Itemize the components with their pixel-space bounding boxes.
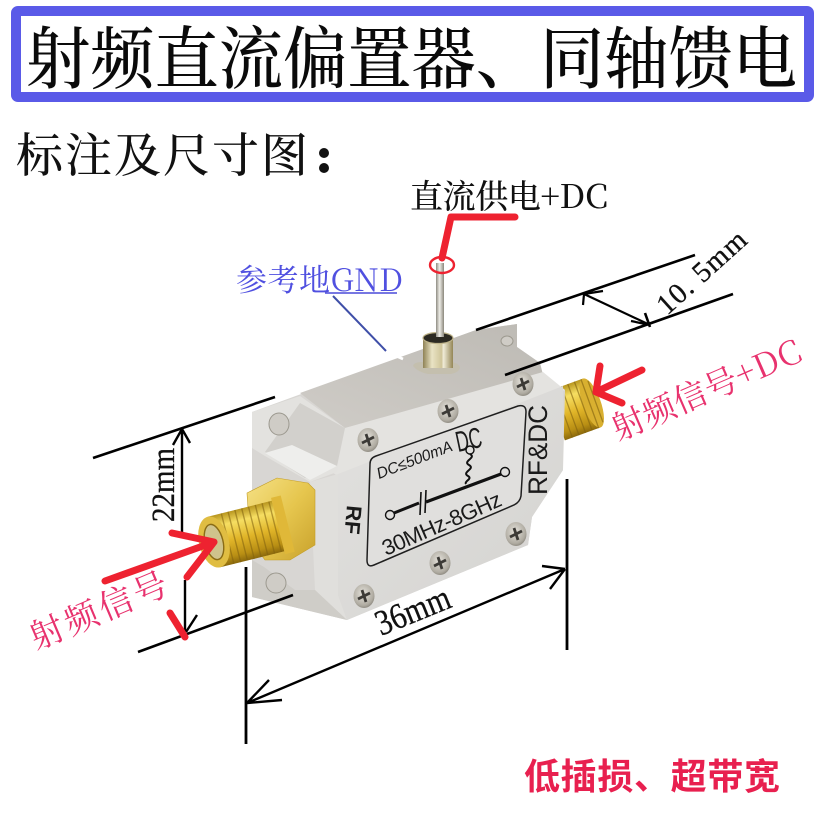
left connector [192, 478, 315, 574]
label text: RF and DC port: RF&DC [523, 405, 553, 495]
arrow: RF input [105, 533, 214, 637]
feature note: 低插损、超带宽 [524, 748, 780, 800]
label: reference ground: 参考地GND [236, 255, 403, 300]
dimension: 22mm: 22mm [146, 448, 182, 522]
label text: RF port: RF [340, 505, 366, 535]
label: DC supply: 直流供电+DC [410, 171, 608, 218]
label text: current limit: DC≤500mA [374, 438, 455, 483]
right connector [547, 375, 609, 440]
device body [252, 324, 565, 620]
title banner: 射频直流偏置器、同轴馈电 [26, 5, 797, 103]
threaded mounting holes [266, 336, 513, 593]
dimension: 10.5mm [476, 224, 754, 375]
label text: DC port: DC [453, 422, 485, 459]
arrow: DC supply pointer [430, 217, 515, 273]
screws [354, 372, 534, 608]
dimension: 10.5mm: 10. 5mm [650, 224, 754, 321]
subtitle: 标注及尺寸图 [16, 119, 308, 186]
label: reference ground [236, 255, 403, 359]
dimension: 22mm [93, 397, 293, 652]
top DC feed pin [413, 263, 460, 374]
product label outline [367, 406, 526, 566]
arrow: RF+DC input [596, 366, 642, 403]
dimension: 36mm: 36mm [369, 577, 456, 643]
label: RF signal plus DC: 射频信号+DC [603, 326, 808, 450]
label text: frequency range: 30MHz-8GHz [378, 487, 505, 561]
label: RF signal: 射频信号 [21, 557, 174, 659]
dimension: 36mm [246, 479, 567, 744]
circuit symbol [386, 446, 510, 520]
